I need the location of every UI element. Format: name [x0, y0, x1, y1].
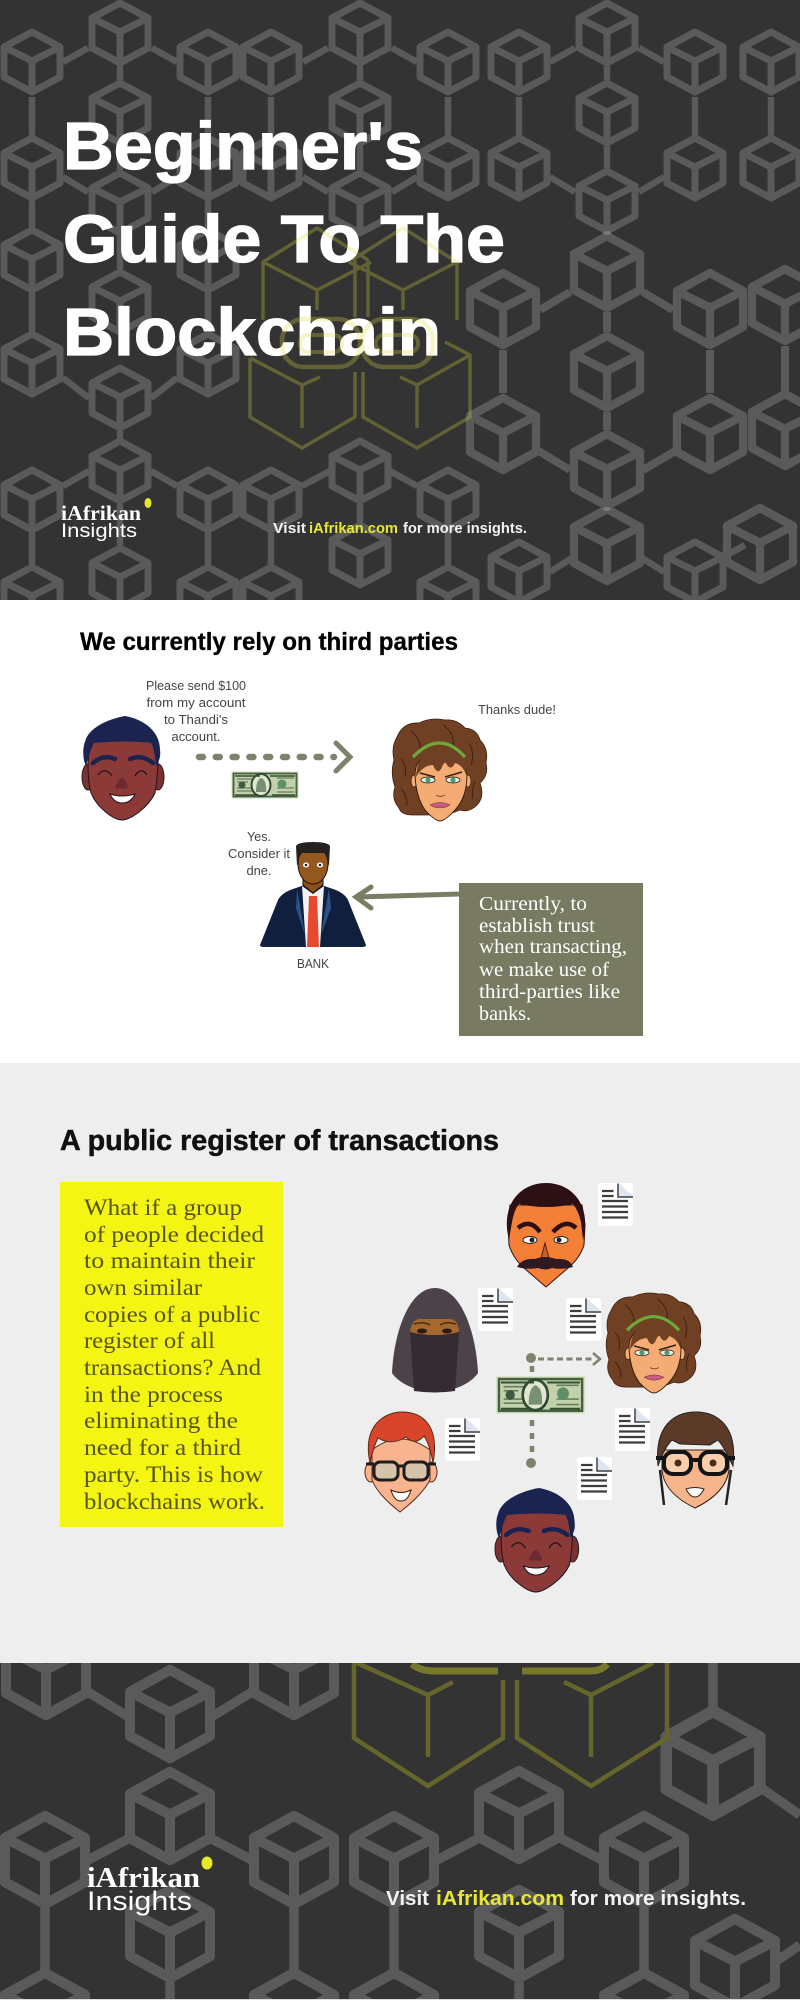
- icon: redhead man: [365, 1412, 437, 1512]
- title: Guide To The: [63, 202, 505, 277]
- callout: explanation: What if a group: [84, 1195, 242, 1220]
- text: visit link: [273, 521, 527, 537]
- icon: man face: [495, 1488, 579, 1592]
- speech: thanks: Thanks dude!: [478, 702, 556, 717]
- speech: request: from my account: [146, 695, 246, 710]
- panel: hero header: [0, 0, 800, 627]
- blockchain cube pattern: [0, 1663, 800, 1999]
- icon: woman face: [392, 719, 487, 821]
- title: [63, 109, 505, 370]
- label: bank: BANK: [297, 956, 329, 971]
- icons: register documents: [445, 1183, 650, 1500]
- text: visit link: Visit: [273, 521, 306, 537]
- callout: trust: establish trust: [479, 916, 596, 937]
- arrow: dotted transfer: [199, 743, 350, 771]
- callout: trust: third-parties like: [479, 982, 620, 1003]
- title: Blockchain: [63, 295, 441, 370]
- logo: iAfrikan Insights: [61, 498, 152, 542]
- icon: niqab woman: [392, 1288, 478, 1392]
- logo: iAfrikan Insights: Insights: [61, 521, 137, 542]
- callout: explanation: register of all: [84, 1328, 215, 1353]
- icon: woman face: [606, 1293, 701, 1393]
- speech: request: to Thandi's: [164, 712, 229, 727]
- callout: explanation: own similar: [84, 1275, 202, 1300]
- callout: trust: banks.: [479, 1004, 531, 1025]
- callout: explanation: transactions? And: [84, 1355, 262, 1380]
- speech: request: [146, 678, 246, 744]
- heading: A public register of transactions: [60, 1125, 499, 1157]
- text: visit link: for more insights.: [403, 521, 527, 537]
- arrow: dotted network: [526, 1353, 600, 1468]
- logo: iAfrikan Insights: iAfrikan: [61, 501, 141, 525]
- icon: man face: [82, 716, 164, 820]
- speech: bank reply: [228, 829, 290, 878]
- icon: yellow linked blocks: [352, 1663, 670, 1788]
- callout: explanation: in the process: [84, 1382, 223, 1407]
- icon: banknote: [497, 1377, 584, 1413]
- speech: bank reply: dne.: [246, 863, 272, 878]
- callout: explanation: party. This is how: [84, 1462, 263, 1487]
- callout: trust: when transacting,: [479, 937, 627, 958]
- callout: trust: [459, 883, 643, 1036]
- logo: iAfrikan Insights: Insights: [87, 1886, 192, 1916]
- callout: explanation: of people decided: [84, 1222, 265, 1247]
- icon: banker: [260, 842, 366, 947]
- callout: explanation: to maintain their: [84, 1248, 255, 1273]
- heading: We currently rely on third parties: [80, 628, 458, 656]
- speech: request: account.: [172, 729, 220, 744]
- panel: third parties: [0, 600, 800, 1063]
- arrow: to bank: [356, 887, 459, 908]
- icon: glasses woman: [656, 1412, 735, 1508]
- speech: bank reply: Consider it: [228, 846, 290, 861]
- callout: explanation: [60, 1182, 283, 1527]
- callout: explanation: copies of a public: [84, 1302, 260, 1327]
- callout: trust: Currently, to: [479, 894, 587, 915]
- speech: bank reply: Yes.: [247, 829, 271, 844]
- callout: explanation: need for a third: [84, 1435, 242, 1460]
- panel: public register: [0, 1063, 800, 1663]
- text: visit link: iAfrikan.com: [309, 521, 398, 537]
- text: visit link: Visit: [386, 1888, 429, 1910]
- text: visit link: for more insights.: [570, 1888, 746, 1910]
- logo: iAfrikan Insights: [87, 1856, 212, 1916]
- icon: yellow linked blocks: [250, 228, 470, 448]
- logo: iAfrikan Insights: iAfrikan: [87, 1862, 200, 1894]
- callout: explanation: blockchains work.: [84, 1489, 265, 1514]
- text: visit link: iAfrikan.com: [436, 1888, 564, 1910]
- callout: explanation: eliminating the: [84, 1408, 238, 1433]
- blockchain cube pattern: [4, 3, 800, 627]
- title: Beginner's: [63, 109, 423, 184]
- text: visit link: [386, 1888, 746, 1910]
- panel: footer: [0, 1627, 800, 2000]
- icon: banknote: [232, 772, 298, 798]
- callout: trust: we make use of: [479, 960, 610, 981]
- icon: mustache man: [507, 1183, 585, 1287]
- speech: request: Please send $100: [146, 678, 246, 693]
